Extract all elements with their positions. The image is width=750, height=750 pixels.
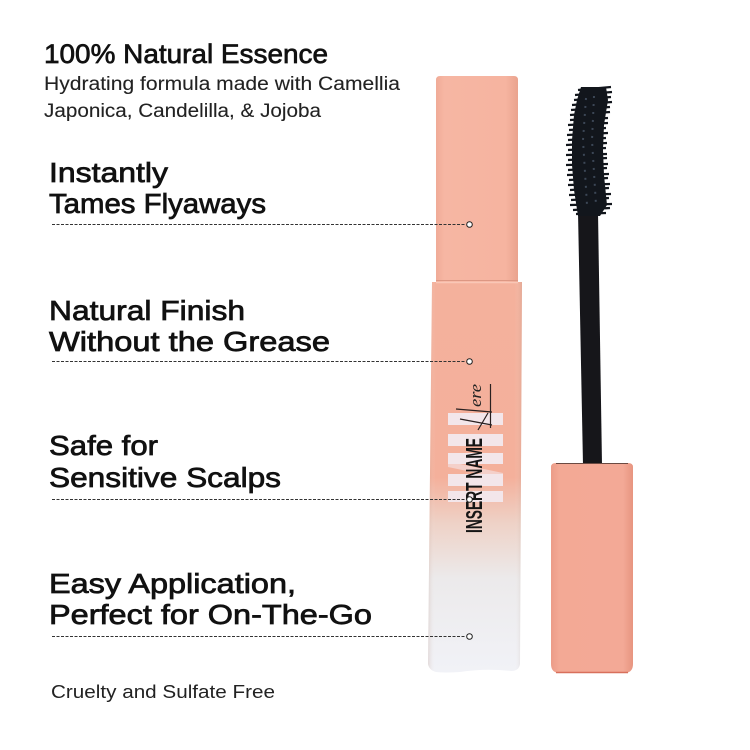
- callout: Easy Application, Perfect for On-The-Go: Easy Application,: [49, 568, 296, 599]
- tube lower body with gradient: [428, 282, 522, 672]
- footer note: Cruelty and Sulfate Free: [51, 682, 275, 702]
- callout: Instantly Tames Flyaways: [49, 157, 472, 227]
- callout: Easy Application, Perfect for On-The-Go: Perfect for On-The-Go: [49, 599, 372, 630]
- tube label: INSERT NAME: INSERT NAME: [461, 438, 487, 533]
- heading: 100% Natural Essence: 100% Natural Essence: [44, 39, 328, 69]
- callout: Safe for Sensitive Scalps: Safe for: [49, 430, 158, 461]
- tube label: Here script: [456, 384, 492, 430]
- text block: formula description: Hydrating formula made with Camellia: [44, 74, 400, 95]
- panel: mascara tube: [428, 76, 522, 672]
- callout: Safe for Sensitive Scalps: [49, 430, 472, 502]
- callout: Easy Application, Perfect for On-The-Go: [49, 568, 472, 639]
- wand stem: [578, 212, 602, 465]
- tube label: Here script: ere: [466, 384, 485, 407]
- callout: Natural Finish Without the Grease: Natural Finish: [49, 295, 245, 326]
- text block: formula description: Japonica, Candelilla, & Jojoba: [44, 101, 321, 122]
- wand brush: [566, 87, 612, 216]
- tube upper section: [436, 76, 518, 283]
- panel: mascara wand: [566, 87, 612, 465]
- callout: Safe for Sensitive Scalps: Sensitive Scalps: [49, 462, 281, 493]
- callout: Natural Finish Without the Grease: Without the Grease: [49, 326, 330, 357]
- text block: formula description: [44, 74, 400, 122]
- callout: Instantly Tames Flyaways: Instantly: [49, 157, 168, 188]
- callout: Instantly Tames Flyaways: Tames Flyaways: [49, 188, 266, 219]
- panel: mascara cap: [551, 463, 633, 673]
- callout: Natural Finish Without the Grease: [49, 295, 472, 364]
- tube logo: INH: [448, 413, 503, 502]
